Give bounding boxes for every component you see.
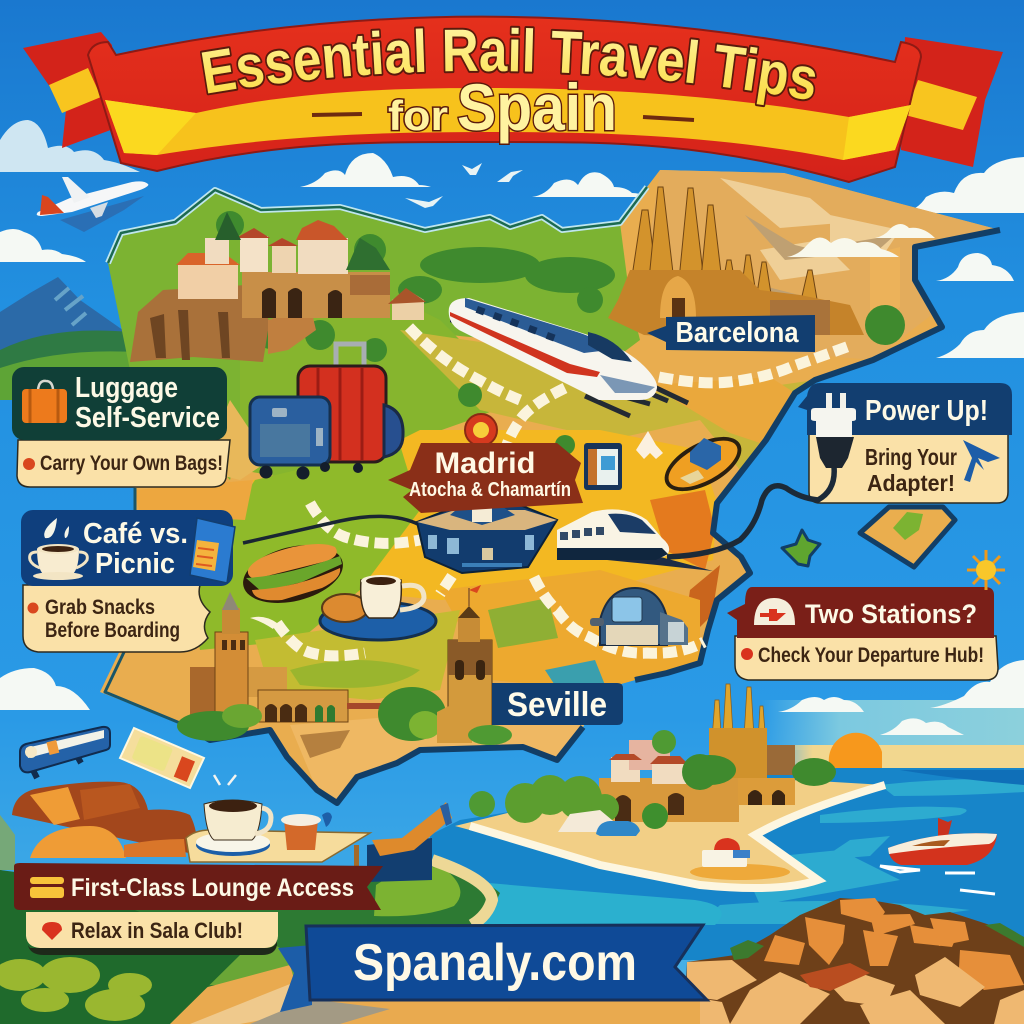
- Sagrada Familia, Barcelona landmark: [608, 187, 864, 340]
- icon: luggage, red and blue suitcases: [250, 344, 403, 480]
- title banner with Spanish flag colours: [23, 16, 1003, 183]
- callout: Power Up!: Adapter!: [867, 470, 955, 496]
- side table: [186, 830, 370, 862]
- glass of tea: [284, 820, 318, 850]
- route tail: [250, 617, 277, 629]
- southwest land, green with path: [0, 815, 700, 1024]
- title text: Essential Rail Travel Tips: [200, 26, 817, 108]
- Seville city label: Seville: [507, 686, 607, 724]
- banner body: [88, 17, 921, 182]
- mountain and left hills: [0, 277, 135, 400]
- callout: First-Class Lounge Access: First-Class Lounge Access: [71, 874, 354, 902]
- right ribbon tail: [901, 37, 1003, 167]
- icon: lounge pass: [120, 728, 204, 788]
- icon: blue arrow: [963, 440, 1000, 482]
- callout: Luggage Self-Service: Luggage: [75, 372, 178, 404]
- armchair: [12, 782, 198, 855]
- banner: Spanaly.com: Spanaly.com: [353, 934, 637, 992]
- callout: Power Up!: [667, 383, 1012, 557]
- callout: Cafe vs. Picnic: Before Boarding: [45, 619, 180, 642]
- icon: travel pillow: [656, 426, 750, 502]
- callout: Two Stations?: Two Stations?: [805, 599, 977, 629]
- blue stand and orange bolster: [367, 838, 432, 882]
- sea in the bay: [430, 768, 1024, 960]
- Madrid location pin: [465, 414, 497, 446]
- rocky cliffs bottom right: [684, 898, 1024, 1024]
- coastal town with cathedral: [469, 684, 836, 836]
- icon: airplane: [37, 177, 148, 232]
- icon: departure board: [584, 443, 622, 490]
- icon: orange suitcase: [22, 381, 67, 423]
- title text: for: [388, 92, 448, 139]
- coffee cup on saucer: [196, 834, 270, 856]
- dashed rail route lines: [277, 327, 852, 656]
- icon: blue timetable booklet: [190, 518, 235, 583]
- icon: plug with cable: [667, 393, 856, 557]
- setting sun on the horizon: [829, 733, 882, 768]
- callout: First-Class Lounge Access: Relax in Sala Club!: [71, 918, 243, 943]
- sandy beach and town shore: [455, 780, 885, 888]
- birds: [405, 163, 523, 208]
- yellow-green midlands: [400, 330, 815, 470]
- Madrid city label: Atocha & Chamartín: [409, 479, 571, 501]
- banner: Spanaly.com: [278, 925, 707, 1012]
- central plain: [253, 430, 717, 600]
- Madrid city label: Madrid: [434, 447, 536, 480]
- callout: Two Stations?: [727, 587, 998, 680]
- coast lines: [105, 187, 1000, 803]
- callout: Cafe vs. Picnic: Café vs.: [83, 518, 188, 550]
- clouds: [0, 120, 1024, 735]
- icon: high-speed train at station: [557, 509, 713, 571]
- callout: Luggage Self-Service: Self-Service: [75, 402, 220, 434]
- Barcelona city label: Barcelona: [676, 317, 799, 349]
- cable line to Madrid station: [243, 516, 420, 543]
- far horizon band: [760, 700, 1024, 768]
- callout: Two Stations?: Check Your Departure Hub!: [758, 644, 984, 667]
- callout: Luggage Self-Service: [12, 367, 230, 487]
- callout: First-Class Lounge Access: [14, 863, 383, 955]
- icon: beach van: [702, 838, 750, 867]
- Madrid station building: [417, 505, 557, 573]
- left Seville-side tower and palace: [177, 592, 397, 741]
- high-speed train, top: [449, 298, 688, 416]
- icon: napkin: [636, 431, 663, 459]
- icon: first aid sign: [754, 598, 795, 625]
- title text: [200, 26, 817, 145]
- barcelona desert: [640, 170, 1000, 360]
- left ribbon tail: [23, 32, 116, 148]
- map of Spain: [100, 170, 1000, 803]
- callout: Cafe vs. Picnic: Picnic: [95, 548, 175, 580]
- south tan shore: [290, 700, 600, 803]
- title text: Spain: [457, 70, 617, 144]
- green forests: [216, 211, 905, 455]
- mainland land fill: [100, 170, 1000, 803]
- small clouds over the desert: [787, 224, 935, 257]
- icon: sun: [967, 550, 1005, 590]
- Seville cathedral tower: [378, 585, 512, 745]
- icon: sandwich: [237, 535, 349, 613]
- icon: small regional station: [590, 588, 688, 645]
- lounge table scene with armchair and coffee: [12, 775, 452, 882]
- callout: Cafe vs. Picnic: Grab Snacks: [45, 596, 155, 619]
- coastal castle, north-west: [130, 212, 426, 362]
- callout: Power Up!: Bring Your: [865, 444, 957, 470]
- icon: blue train ticket: [20, 727, 110, 778]
- icon: coffee cup with steam: [30, 518, 87, 580]
- balearic islands: [860, 507, 955, 567]
- callout: Cafe vs. Picnic: [21, 510, 235, 652]
- callout: Power Up!: Power Up!: [865, 395, 988, 427]
- north green band: [108, 190, 640, 480]
- icon: red boat: [880, 818, 997, 894]
- callout: Luggage Self-Service: Carry Your Own Bags!: [40, 452, 223, 475]
- title text: Essential Rail Travel Tips: [202, 28, 816, 106]
- Madrid city label: [388, 443, 583, 513]
- icon: coffee cup and croissant on plate: [320, 575, 436, 640]
